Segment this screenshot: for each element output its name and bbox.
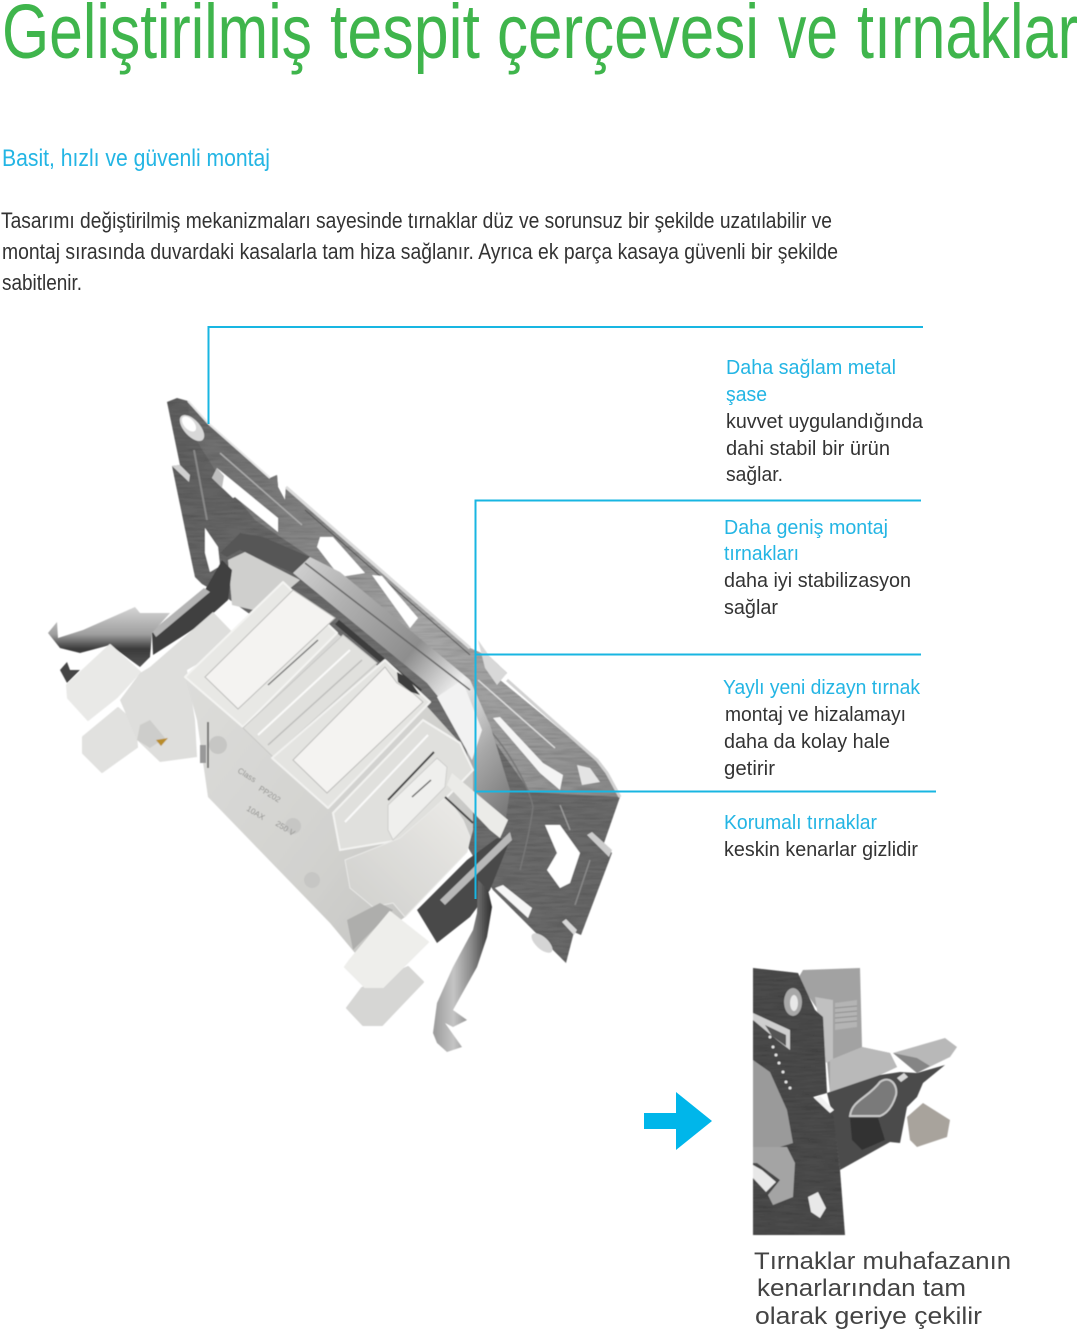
intro paragraph: Tasarımı değiştirilmiş mekanizmaları sayesinde tırnaklar düz ve sorunsuz bir şekilde uzatılabilir ve [1, 208, 832, 233]
leader line: tabs callout [476, 500, 921, 899]
callout: protected tabs [724, 812, 918, 861]
rocker key one frame [185, 582, 337, 727]
metal fastening band [220, 533, 510, 825]
product illustration: switch mechanism with metal frame [48, 398, 620, 1052]
small slider tab [388, 758, 447, 840]
callout: wider mounting tabs: tırnakları [724, 543, 799, 565]
rocker middle [243, 635, 377, 757]
bottom white tab [345, 912, 428, 987]
callout: wider mounting tabs: sağlar [724, 597, 778, 619]
grey switch housing [797, 968, 897, 1093]
rocker key three frame [272, 660, 430, 808]
inset photo: retracted tab detail [753, 968, 957, 1235]
metal bracket [827, 1065, 945, 1170]
side key [333, 720, 473, 850]
subheading: Basit, hızlı ve güvenli montaj [2, 145, 270, 172]
lower metal box [417, 838, 510, 943]
inset caption [754, 1248, 1011, 1330]
title [2, 0, 1078, 75]
metal box strip [440, 832, 512, 905]
grey curved part [753, 1060, 793, 1147]
intro paragraph: sabitlenir. [2, 270, 82, 295]
icon: blue arrow [644, 1092, 712, 1150]
inset caption: kenarlarından tam [757, 1275, 966, 1302]
callout: spring design: montaj ve hizalamayı [725, 704, 906, 726]
body details [200, 722, 320, 888]
callout: stronger metal chassis: dahi stabil bir ürün [726, 438, 890, 460]
spring clip, lower [433, 880, 492, 1052]
lower tab [907, 1103, 950, 1147]
slot [753, 1013, 790, 1050]
grey shadow below block [347, 903, 393, 950]
leader line: frame callout [208, 327, 923, 424]
white flat slider arm [447, 773, 508, 838]
callout: spring design [723, 677, 921, 780]
white lower block [345, 797, 470, 917]
white plastic tabs [67, 612, 423, 1025]
spring clip tail, left [60, 662, 80, 683]
callout: wider mounting tabs [724, 517, 911, 619]
top ring [784, 988, 802, 1016]
callout: stronger metal chassis: Daha sağlam metal [726, 357, 896, 379]
grey clip lower left [753, 1147, 795, 1205]
upper tab [893, 1038, 957, 1073]
callout: stronger metal chassis: sağlar. [726, 464, 783, 486]
lower hole [808, 1192, 826, 1218]
callout: stronger metal chassis: şase [726, 384, 767, 406]
warning mark [156, 738, 168, 746]
inset caption: Tırnaklar muhafazanın [754, 1248, 1011, 1275]
callout: wider mounting tabs: Daha geniş montaj [724, 517, 888, 539]
intro paragraph: montaj sırasında duvardaki kasalarla tam hiza sağlanır. Ayrıca ek parça kasaya güvenli bir şekilde [2, 239, 838, 264]
callout: spring design: daha da kolay hale [724, 731, 890, 753]
callout: protected tabs: Korumalı tırnaklar [724, 812, 877, 834]
bracket highlight [152, 588, 210, 637]
body details: PP202 [257, 784, 283, 805]
intro paragraph [1, 208, 838, 295]
body details: Class [236, 766, 258, 784]
rocker key one [205, 590, 335, 709]
callout: spring design: getirir [724, 758, 775, 780]
leader line: spring callout [475, 654, 921, 656]
dark metal plate [753, 968, 845, 1235]
dark gap behind keys [337, 622, 420, 692]
spring clip, upper left [48, 607, 170, 667]
switch body [185, 582, 473, 953]
callout: stronger metal chassis [726, 357, 924, 486]
callout: protected tabs: keskin kenarlar gizlidir [724, 839, 918, 861]
callout: spring design: Yaylı yeni dizayn tırnak [723, 677, 921, 699]
small dots [768, 1036, 792, 1090]
recess behind body [228, 552, 300, 612]
body details: 250 V [274, 819, 297, 838]
body details: 10AX [245, 804, 267, 822]
rocker key three [293, 667, 423, 793]
callout: wider mounting tabs: daha iyi stabilizasyon [724, 570, 911, 592]
metal frame [167, 398, 620, 963]
side bracket [152, 560, 232, 655]
leader line: protected callout [475, 790, 936, 792]
inset caption: olarak geriye çekilir [755, 1303, 982, 1330]
callout: stronger metal chassis: kuvvet uygulandığında [726, 411, 924, 433]
